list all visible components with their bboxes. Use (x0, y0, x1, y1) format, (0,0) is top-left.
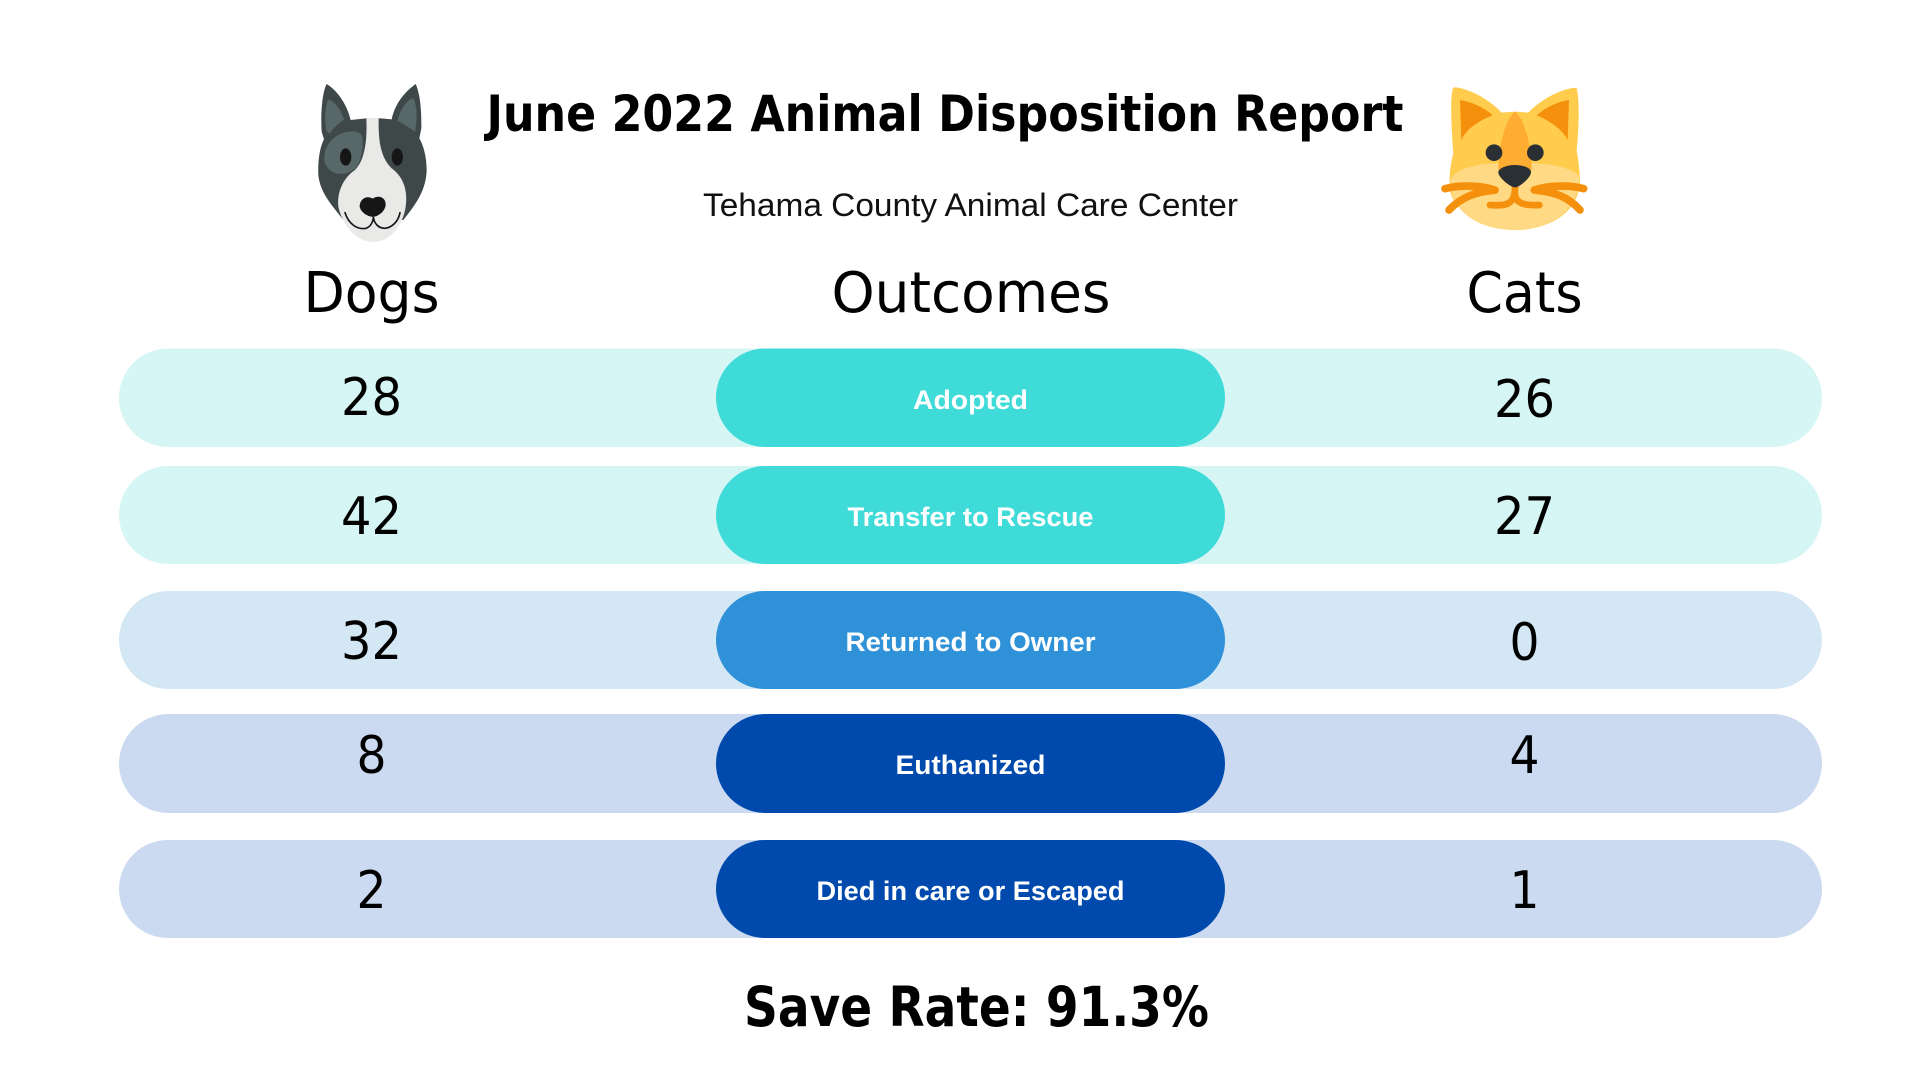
row: Returned to Owner (119, 591, 1822, 689)
row: Euthanized (119, 714, 1822, 813)
dogs transferred: 42 (341, 487, 402, 547)
save rate: Save Rate: 91.3% (744, 975, 1209, 1039)
label: Died in care or Escaped: Died in care or Escaped (816, 876, 1124, 906)
column heading: Cats: Cats (1466, 261, 1582, 326)
title: June 2022 Animal Disposition Report (484, 85, 1404, 143)
label: Euthanized: Euthanized (896, 750, 1046, 780)
label: Transfer to Rescue: Transfer to Rescue (848, 502, 1094, 532)
dogs died or escaped: 2 (356, 861, 386, 921)
cats returned: 0 (1510, 613, 1540, 673)
icon: dog face (318, 84, 427, 242)
icon: cat face (1445, 87, 1584, 230)
cats euthanized: 4 (1510, 726, 1540, 786)
label: Returned to Owner: Returned to Owner (846, 627, 1096, 657)
column heading: Dogs: Dogs (304, 261, 440, 326)
dogs returned: 32 (341, 612, 402, 672)
dogs adopted: 28 (341, 368, 402, 428)
row: Died in care or Escaped (119, 840, 1822, 938)
subtitle: Tehama County Animal Care Center (703, 187, 1238, 223)
dogs euthanized: 8 (356, 726, 386, 786)
column heading: Outcomes: Outcomes (832, 261, 1110, 326)
row: Transfer to Rescue (119, 466, 1822, 564)
row: Adopted (119, 348, 1822, 447)
cats died or escaped: 1 (1510, 861, 1540, 921)
cats adopted: 26 (1494, 370, 1555, 430)
label: Adopted: Adopted (913, 385, 1028, 415)
cats transferred: 27 (1494, 487, 1555, 547)
